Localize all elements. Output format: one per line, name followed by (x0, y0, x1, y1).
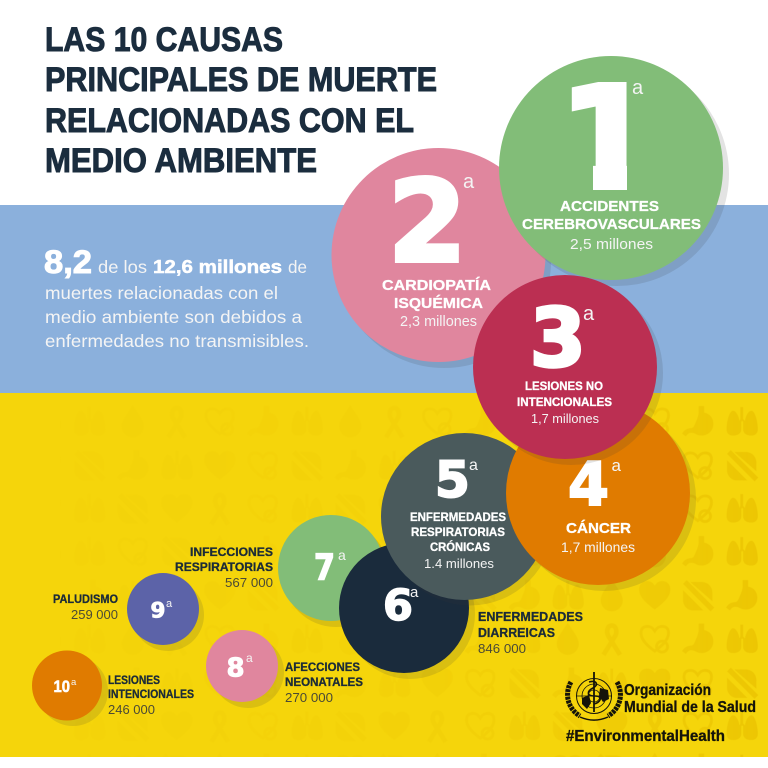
circle 9: paludismo: a (166, 598, 173, 610)
title: MEDIO AMBIENTE (45, 142, 317, 180)
label: enfermedades diarreicas: DIARREICAS (478, 625, 555, 640)
label: infecciones respiratorias (175, 545, 273, 590)
circle 7: infecciones respiratorias: 7 (314, 548, 335, 588)
circle 6: enfermedades diarreicas: a (410, 584, 419, 601)
title: RELACIONADAS CON EL (45, 102, 414, 140)
background health icon pattern (580, 406, 758, 757)
circle 6: enfermedades diarreicas (339, 543, 475, 679)
circle 9: paludismo (127, 573, 204, 651)
numeral 1: 1 (559, 58, 656, 221)
circle 4: cancer: 4 (568, 450, 609, 520)
circle 5: enfermedades respiratorias cronicas (381, 433, 554, 606)
summary text: muertes relacionadas con el (45, 283, 278, 303)
label: paludismo (53, 592, 118, 622)
label: enfermedades diarreicas: 846 000 (478, 641, 526, 656)
circle 5: enfermedades respiratorias cronicas: RESPIRATORIAS (411, 525, 505, 539)
circle 2: cardiopatia isquemica: ISQUÉMICA (394, 295, 483, 312)
summary text: 12,6 millones (153, 256, 282, 277)
label: enfermedades diarreicas (478, 609, 583, 656)
circle 3: lesiones no intencionales: INTENCIONALES (517, 395, 612, 409)
circle 8: afecciones neonatales: 8 (226, 654, 245, 684)
circle 10: lesiones intencionales: 10 (54, 677, 70, 696)
label: paludismo: PALUDISMO (53, 592, 118, 606)
circle 8: afecciones neonatales (206, 630, 284, 708)
circle 5: enfermedades respiratorias cronicas: 1.4 millones (424, 556, 494, 571)
circle 4: cancer: CÁNCER (566, 520, 631, 537)
circle 2: cardiopatia isquemica: a (463, 171, 475, 193)
label: enfermedades diarreicas: ENFERMEDADES (478, 609, 583, 624)
circle 2: cardiopatia isquemica: CARDIOPATÍA (382, 277, 491, 294)
label: afecciones neonatales: 270 000 (285, 690, 333, 705)
label: paludismo: 259 000 (71, 607, 118, 622)
circle 7: infecciones respiratorias (278, 515, 389, 627)
hashtag: #EnvironmentalHealth (566, 728, 725, 745)
label: afecciones neonatales: AFECCIONES (285, 660, 360, 674)
circle 1: accidentes cerebrovasculares: CEREBROVASCULARES (522, 216, 701, 233)
summary text: de los (98, 257, 147, 277)
circle 5: enfermedades respiratorias cronicas: 5 (435, 451, 470, 509)
circle 4: cancer: 1,7 millones (561, 539, 635, 555)
circle 5: enfermedades respiratorias cronicas: ENFERMEDADES (410, 510, 506, 524)
label: infecciones respiratorias: RESPIRATORIAS (175, 560, 273, 574)
label: infecciones respiratorias: INFECCIONES (190, 545, 273, 559)
circle 1: accidentes cerebrovasculares (499, 56, 729, 286)
summary text: de (288, 257, 307, 277)
WHO name: Organización (624, 682, 711, 699)
WHO name: Mundial de la Salud (624, 699, 756, 716)
label: lesiones intencionales (108, 673, 194, 717)
circle 10: lesiones intencionales: a (71, 677, 77, 688)
circle 3: lesiones no intencionales: a (583, 303, 595, 325)
circle 5: enfermedades respiratorias cronicas: CRÓNICAS (430, 539, 490, 554)
circle 2: cardiopatia isquemica (332, 148, 551, 368)
WHO logo emblem (568, 672, 620, 720)
circle 1: accidentes cerebrovasculares: 2,5 millones (570, 236, 653, 253)
yellow band (0, 393, 768, 757)
label: infecciones respiratorias: 567 000 (225, 575, 273, 590)
circle 1: accidentes cerebrovasculares: ACCIDENTES (560, 198, 659, 215)
circle 9: paludismo: 9 (150, 598, 165, 624)
summary text (44, 244, 309, 351)
label: lesiones intencionales: LESIONES (108, 673, 160, 687)
summary text: medio ambiente son debidos a (45, 307, 302, 327)
label: afecciones neonatales: NEONATALES (285, 675, 363, 689)
circle 1: accidentes cerebrovasculares: a (632, 77, 644, 99)
circle 8: afecciones neonatales: a (246, 651, 253, 665)
circle 10: lesiones intencionales (32, 650, 108, 726)
circle 2: cardiopatia isquemica: 2,3 millones (400, 313, 477, 330)
summary text: 8,2 (44, 244, 92, 280)
label: lesiones intencionales: 246 000 (108, 702, 155, 717)
circle 7: infecciones respiratorias: a (338, 547, 346, 563)
circle 3: lesiones no intencionales: 1,7 millones (531, 411, 599, 426)
blue band (0, 205, 768, 393)
title: LAS 10 CAUSAS (45, 21, 283, 59)
WHO name (624, 682, 756, 716)
summary text: enfermedades no transmisibles. (45, 331, 309, 351)
circle 5: enfermedades respiratorias cronicas: a (469, 457, 478, 474)
title: PRINCIPALES DE MUERTE (45, 61, 437, 99)
circle 4: cancer (506, 401, 696, 591)
circle 6: enfermedades diarreicas: 6 (383, 581, 413, 631)
title (45, 21, 437, 180)
circle 3: lesiones no intencionales (473, 275, 663, 465)
circle 3: lesiones no intencionales: 3 (530, 292, 586, 385)
label: afecciones neonatales (285, 660, 363, 705)
circle 3: lesiones no intencionales: LESIONES NO (525, 379, 603, 393)
circle 4: cancer: a (612, 456, 622, 475)
circle 2: cardiopatia isquemica: 2 (388, 156, 467, 288)
label: lesiones intencionales: INTENCIONALES (108, 687, 194, 701)
